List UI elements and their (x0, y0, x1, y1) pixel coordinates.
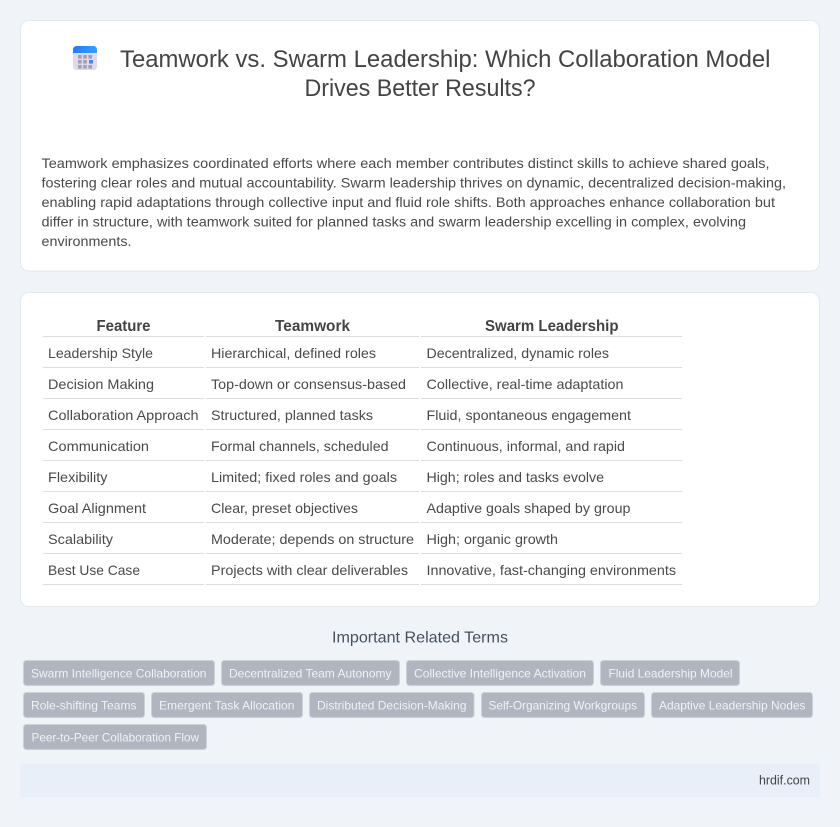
table header row: Teamwork (275, 318, 350, 335)
title (120, 46, 770, 102)
row: communication (43, 438, 682, 461)
chip: peer-to-peer collaboration flow (24, 724, 206, 750)
related terms chips (24, 660, 812, 750)
row: collaboration approach: Structured, planned tasks (211, 407, 373, 423)
row: collaboration approach: Collaboration Approach (48, 407, 198, 423)
footer bar (20, 764, 820, 797)
row: best use case: Projects with clear deliverables (211, 562, 408, 578)
chip: swarm intelligence collaboration (24, 660, 214, 686)
chip: adaptive leadership nodes (652, 692, 812, 718)
chip: role-shifting teams: Role-shifting Teams (31, 698, 136, 712)
title: Drives Better Results? (304, 75, 536, 102)
chip: fluid leadership model: Fluid Leadership Model (608, 666, 732, 680)
row: scalability: High; organic growth (426, 531, 558, 547)
row: goal alignment: Clear, preset objectives (211, 500, 358, 516)
icon: calendar (73, 46, 97, 70)
chip: peer-to-peer collaboration flow: Peer-to-Peer Collaboration Flow (32, 730, 199, 744)
chip: distributed decision-making (310, 692, 474, 718)
chip: decentralized team autonomy: Decentralized Team Autonomy (229, 666, 392, 680)
row: decision making: Decision Making (48, 376, 154, 392)
table header row: Swarm Leadership (485, 318, 619, 335)
chip: collective intelligence activation: Collective Intelligence Activation (414, 666, 586, 680)
intro paragraph: differ in structure, with teamwork suited for planned tasks and swarm leadership excelling in complex, evolving (42, 214, 746, 230)
row: flexibility (43, 469, 682, 492)
intro paragraph (42, 155, 786, 249)
row: best use case (43, 562, 682, 585)
chip: self-organizing workgroups (482, 692, 644, 718)
row: communication: Continuous, informal, and rapid (426, 438, 625, 454)
row: communication: Communication (48, 438, 149, 454)
row: decision making: Top-down or consensus-based (211, 376, 406, 392)
chip: decentralized team autonomy (222, 660, 400, 686)
row: goal alignment: Goal Alignment (48, 500, 146, 516)
row: goal alignment (43, 500, 682, 523)
chip: emergent task allocation: Emergent Task Allocation (159, 698, 294, 712)
comparison table panel (20, 292, 820, 606)
row: goal alignment: Adaptive goals shaped by group (426, 500, 631, 516)
chip: swarm intelligence collaboration: Swarm Intelligence Collaboration (31, 666, 206, 680)
header panel (20, 20, 820, 271)
intro paragraph: fostering clear roles and mutual accountability. Swarm leadership thrives on dynamic, decentralized decision-making, (42, 174, 786, 190)
footer source: hrdif.com (759, 773, 810, 787)
chip: emergent task allocation (152, 692, 302, 718)
row: scalability: Moderate; depends on structure (211, 531, 414, 547)
title: Teamwork vs. Swarm Leadership: Which Collaboration Model (120, 46, 770, 73)
row: flexibility: Flexibility (48, 469, 108, 485)
row: collaboration approach: Fluid, spontaneous engagement (426, 407, 631, 423)
row: leadership style: Decentralized, dynamic roles (426, 345, 609, 361)
intro paragraph: environments. (42, 233, 132, 249)
table header row (43, 318, 682, 337)
row: flexibility: High; roles and tasks evolve (426, 469, 604, 485)
chip: distributed decision-making: Distributed Decision-Making (317, 698, 466, 712)
row: leadership style (43, 345, 682, 368)
row: decision making: Collective, real-time adaptation (426, 376, 624, 392)
row: collaboration approach (43, 407, 682, 430)
row: scalability: Scalability (48, 531, 113, 547)
row: best use case: Best Use Case (48, 562, 140, 578)
chip: self-organizing workgroups: Self-Organizing Workgroups (488, 698, 637, 712)
row: communication: Formal channels, scheduled (211, 438, 388, 454)
related terms heading: Important Related Terms (332, 630, 508, 646)
row: best use case: Innovative, fast-changing environments (426, 562, 676, 578)
intro paragraph: Teamwork emphasizes coordinated efforts where each member contributes distinct skills to achieve shared goals, (42, 155, 769, 171)
row: flexibility: Limited; fixed roles and goals (211, 469, 397, 485)
row: leadership style: Hierarchical, defined roles (211, 345, 376, 361)
intro paragraph: enabling rapid adaptations through collective input and fluid role shifts. Both approaches enhance collaboration but (42, 194, 775, 210)
chip: role-shifting teams (24, 692, 144, 718)
table header row: Feature (96, 318, 151, 335)
chip: adaptive leadership nodes: Adaptive Leadership Nodes (659, 698, 806, 712)
chip: collective intelligence activation (406, 660, 594, 686)
row: leadership style: Leadership Style (48, 345, 153, 361)
row: scalability (43, 531, 682, 554)
chip: fluid leadership model (600, 660, 740, 686)
row: decision making (43, 376, 682, 399)
